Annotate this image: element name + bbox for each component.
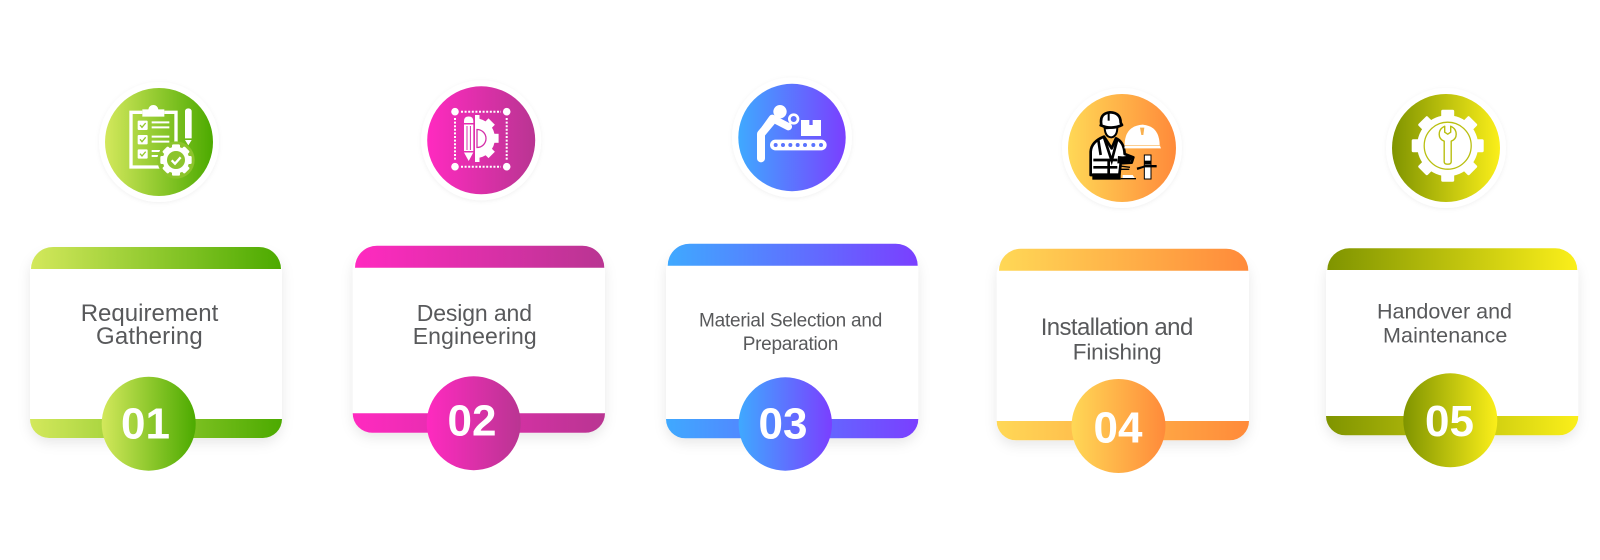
icon: pencil and gear blueprint: [427, 86, 536, 201]
number badge: 04: [1094, 404, 1143, 453]
number badge: [1072, 379, 1166, 473]
icon: gear with wrench: [1386, 88, 1506, 208]
icon: worker at conveyor belt: [732, 78, 852, 198]
number badge: 01: [121, 400, 170, 448]
heading: Material Selection and: [699, 311, 882, 332]
number badge: [739, 377, 832, 471]
panel: step 3 Material Selection and Preparation: [666, 78, 918, 471]
panel: step 2 Design and Engineering: [353, 80, 605, 470]
number badge: 05: [1425, 397, 1474, 446]
heading: Handover and: [1377, 299, 1512, 323]
heading: Gathering: [96, 323, 203, 350]
panel: step 1 Requirement Gathering: [30, 82, 282, 471]
heading: Engineering: [413, 323, 537, 349]
heading: Finishing: [1073, 339, 1162, 364]
card: [997, 249, 1249, 440]
number badge: 02: [448, 397, 496, 446]
number badge: [1403, 373, 1497, 467]
card: [666, 244, 918, 438]
card: [1326, 248, 1578, 435]
heading: Design and: [417, 300, 532, 326]
number badge: [102, 377, 196, 471]
panel: step 5 Handover and Maintenance: [1326, 88, 1578, 467]
panel: step 4 Installation and Finishing: [997, 88, 1249, 473]
number badge: [427, 376, 521, 470]
number badge: 03: [759, 399, 807, 448]
icon: construction worker with hard hat: [1062, 88, 1182, 208]
heading: Maintenance: [1383, 324, 1507, 348]
card: [30, 247, 282, 438]
heading: Requirement: [81, 300, 219, 327]
heading: Installation and: [1041, 314, 1193, 341]
heading: Preparation: [743, 334, 838, 355]
card: [353, 246, 605, 433]
icon: clipboard checklist with gear: [99, 82, 219, 202]
